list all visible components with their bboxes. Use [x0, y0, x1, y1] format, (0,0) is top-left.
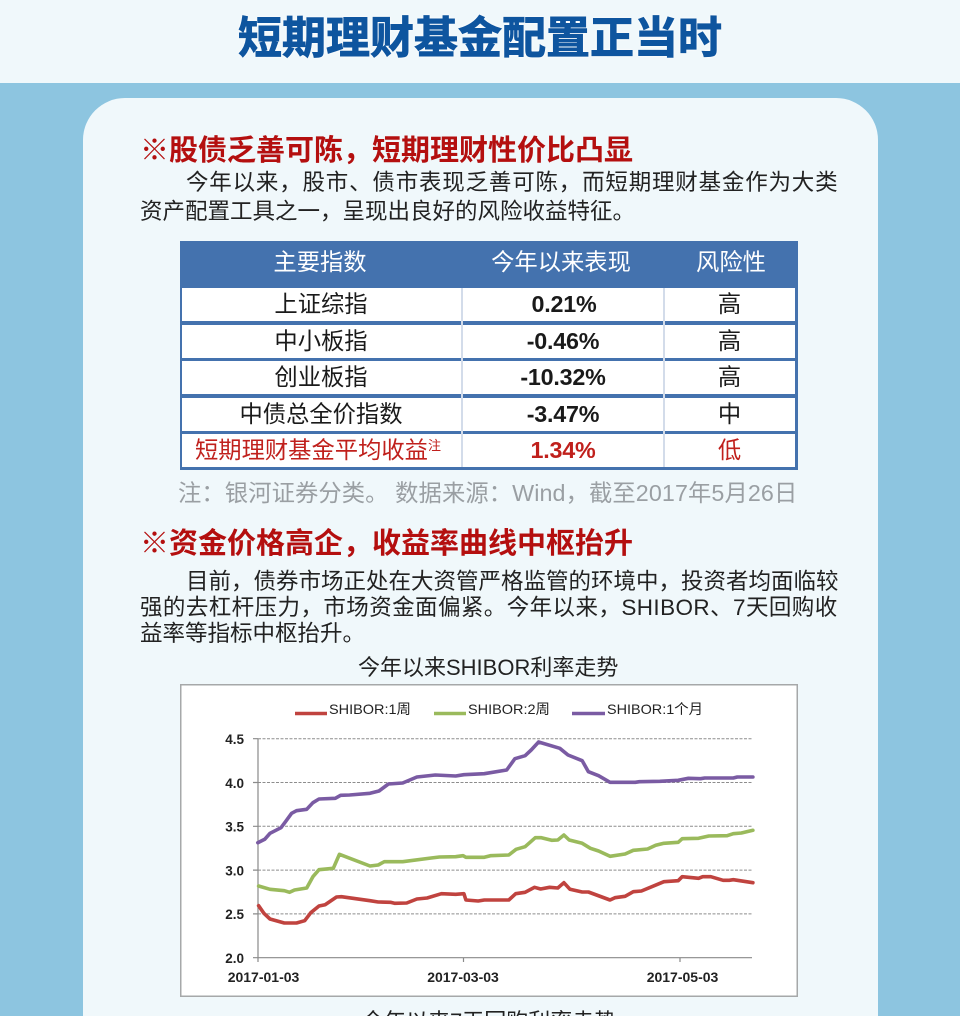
y axis labels: 3.0 — [225, 864, 244, 878]
x axis labels — [228, 969, 719, 985]
row: 中债总全价指数: -3.47% — [527, 401, 599, 427]
row: 中小板指: -0.46% — [527, 328, 599, 354]
row: 中小板指: 中小板指 — [274, 328, 368, 354]
text block: section two intro: 目前，债券市场正处在大资管严格监管的环境中，投资者均面临较 — [186, 569, 839, 594]
text block: section two intro: 强的去杠杆压力，市场资金面偏紧。今年以来，SHIBOR、7天回购收 — [140, 595, 838, 620]
y axis labels: 2.5 — [225, 907, 244, 922]
chart title: 今年以来SHIBOR利率走势 — [358, 655, 618, 680]
text block: section two intro — [140, 569, 839, 646]
row: 创业板指 — [182, 361, 795, 394]
y axis labels: 4.5 — [225, 732, 244, 747]
row: 上证综指: 高 — [718, 291, 741, 317]
text block: section one intro — [140, 170, 838, 224]
row: 短期理财基金平均收益 — [182, 434, 795, 467]
table: index performance — [180, 241, 798, 470]
row: 创业板指: -10.32% — [520, 364, 606, 390]
x axis labels: 2017-03-03 — [427, 969, 499, 985]
series: SHIBOR 2 weeks — [259, 830, 753, 892]
row: 中小板指 — [182, 325, 795, 358]
row: 上证综指: 上证综指 — [274, 291, 368, 317]
legend: 1 month: SHIBOR:1个月 — [607, 701, 703, 717]
y axis labels: 4.0 — [225, 776, 244, 791]
column divider right — [663, 288, 664, 467]
title: 短期理财基金配置正当时 — [238, 14, 722, 63]
row: 中债总全价指数 — [182, 398, 795, 431]
row: 中债总全价指数: 中债总全价指数 — [239, 401, 403, 427]
text block: section one intro: 资产配置工具之一，呈现出良好的风险收益特征。 — [140, 199, 635, 224]
series: SHIBOR 1 week — [259, 877, 753, 923]
text block: section one intro: 今年以来，股市、债市表现乏善可陈，而短期理财基金作为大类 — [186, 170, 838, 195]
table header row: 今年以来表现 — [491, 249, 631, 275]
y axis labels: 3.5 — [225, 820, 244, 834]
series: SHIBOR 1 month — [258, 742, 753, 843]
row: 短期理财基金平均收益: 低 — [718, 437, 741, 463]
table header row: 主要指数 — [273, 249, 367, 275]
row: 创业板指: 高 — [718, 364, 741, 390]
y axis labels: 2.0 — [225, 951, 244, 966]
legend: 2 weeks: SHIBOR:2周 — [468, 701, 550, 717]
legend: 1 week — [295, 701, 411, 717]
row: 上证综指: 0.21% — [531, 291, 597, 317]
row: 中债总全价指数: 中 — [718, 401, 741, 427]
header band — [0, 0, 960, 83]
column divider left — [461, 288, 462, 467]
axes — [253, 739, 752, 962]
grid lines — [258, 739, 753, 914]
text block: section two intro: 益率等指标中枢抬升。 — [140, 621, 365, 646]
table header row: 风险性 — [696, 249, 766, 275]
row: 创业板指: 创业板指 — [274, 364, 368, 390]
row: 短期理财基金平均收益: 短期理财基金平均收益注 — [195, 437, 441, 463]
x axis labels: 2017-01-03 — [228, 969, 300, 985]
table header row — [273, 249, 766, 275]
table note: 注：银河证券分类。 数据来源：Wind，截至2017年5月26日 — [178, 480, 797, 506]
y axis labels — [225, 732, 244, 966]
heading: section two: ※资金价格高企，收益率曲线中枢抬升 — [140, 528, 633, 560]
legend — [295, 701, 703, 717]
series — [258, 742, 753, 923]
row: 上证综指 — [182, 288, 795, 321]
row: 短期理财基金平均收益: 1.34% — [530, 437, 596, 463]
legend: 1 week: SHIBOR:1周 — [329, 701, 411, 717]
line chart: SHIBOR rates — [180, 684, 798, 997]
legend: 2 weeks — [434, 701, 550, 717]
row: 中小板指: 高 — [718, 328, 741, 354]
x axis labels: 2017-05-03 — [647, 969, 719, 985]
heading: section one: ※股债乏善可陈，短期理财性价比凸显 — [140, 135, 633, 167]
panel: content card — [83, 98, 878, 1016]
